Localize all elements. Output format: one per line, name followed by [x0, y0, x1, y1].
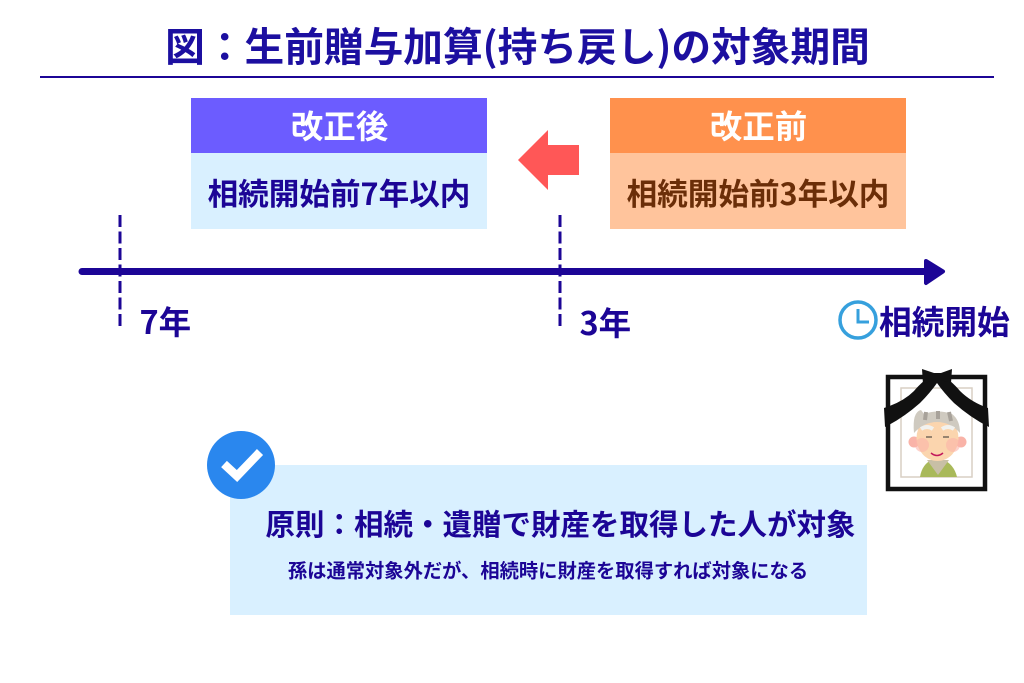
panel: principle: 原則：相続・遺贈で財産を取得した人が対象	[265, 502, 856, 544]
panel: after revision: 改正後	[291, 101, 388, 148]
title: 図：生前贈与加算(持ち戻し)の対象期間	[165, 16, 870, 73]
panel: principle	[230, 465, 867, 615]
panel: before revision: 改正前	[710, 101, 807, 148]
panel: before revision	[610, 98, 906, 229]
label: inheritance start: 相続開始	[879, 297, 1010, 344]
panel: after revision: 相続開始前7年以内	[208, 170, 470, 214]
icon: memorial portrait	[884, 369, 989, 489]
panel: principle: 孫は通常対象外だが、相続時に財産を取得すれば対象になる	[288, 556, 808, 584]
icon: check mark	[207, 431, 275, 499]
arrow: change direction	[518, 130, 579, 190]
marker: 3 years: 3年	[580, 298, 631, 345]
marker: 7 years: 7年	[140, 297, 191, 344]
portrait shoulders	[920, 459, 957, 477]
mourning ribbon	[884, 380, 989, 427]
ribbon bow	[922, 369, 952, 384]
portrait head	[908, 410, 966, 461]
marker: 3 years	[560, 215, 631, 345]
icon: clock	[840, 302, 876, 338]
panel: before revision: 相続開始前3年以内	[627, 170, 889, 214]
marker: 7 years	[120, 215, 191, 344]
panel: after revision	[191, 98, 487, 229]
timeline arrow	[82, 261, 943, 283]
